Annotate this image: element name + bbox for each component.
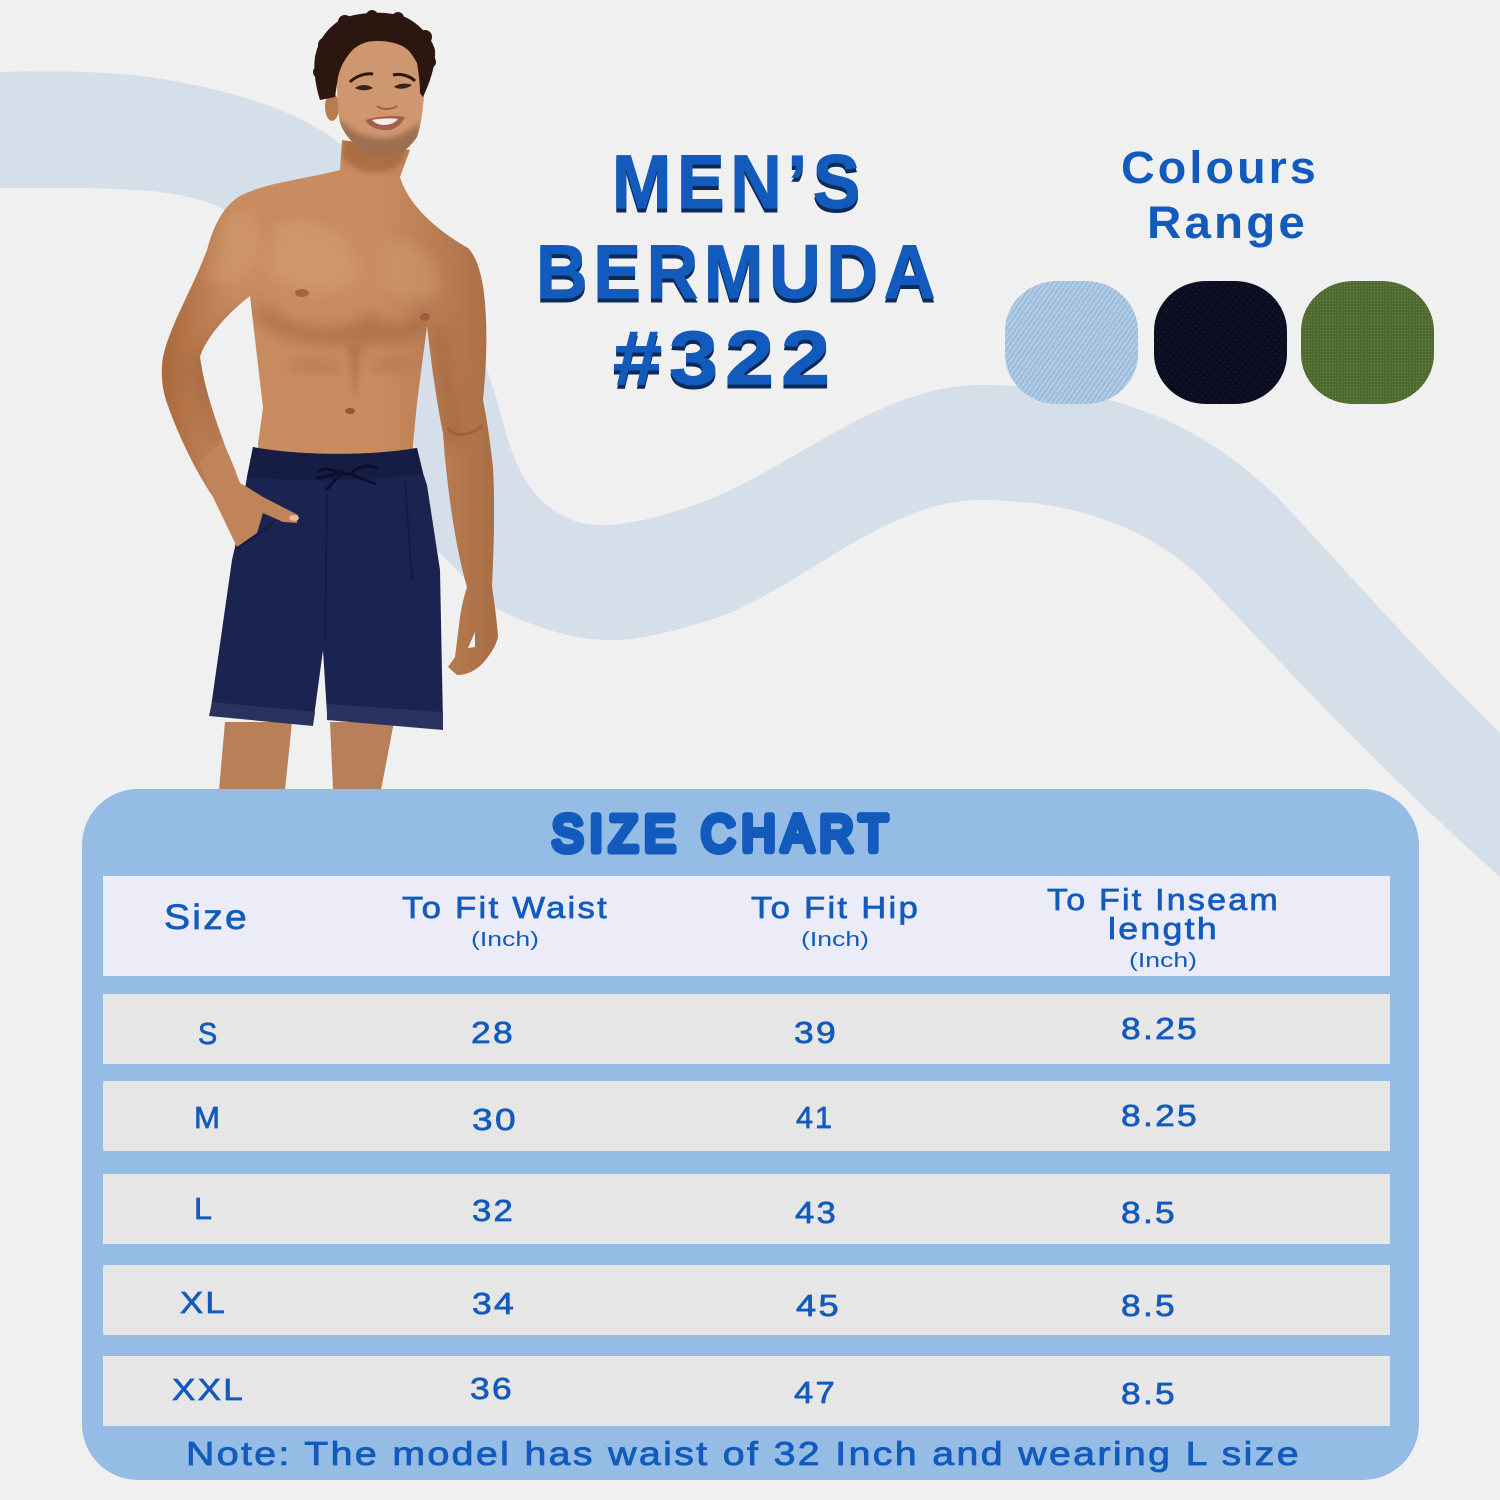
row: M: 41 (796, 1100, 834, 1135)
row: XXL: 36 (470, 1371, 514, 1406)
panel: size chart (82, 789, 1419, 1480)
hair (313, 10, 436, 100)
row: M (103, 1081, 1390, 1151)
fingernail (289, 515, 299, 521)
swatch: olive green (1301, 281, 1434, 404)
colours heading (1121, 142, 1319, 248)
row: L: 43 (795, 1195, 838, 1230)
colour swatches (1005, 281, 1434, 404)
row: L (103, 1174, 1390, 1244)
colours heading: Range (1147, 197, 1308, 248)
legs (219, 722, 394, 790)
smile (365, 116, 405, 130)
colours heading: Colours (1121, 142, 1319, 193)
title: MEN’S (612, 140, 866, 225)
title: #322 (613, 316, 837, 401)
row: S: S (198, 1016, 219, 1051)
head (313, 10, 436, 160)
row: S: 8.25 (1121, 1011, 1199, 1046)
table header row: Size (164, 898, 249, 937)
row: S: 28 (471, 1015, 515, 1050)
row: M: M (194, 1100, 222, 1135)
torso and arms (162, 140, 498, 675)
shorts (209, 447, 443, 730)
title: BERMUDA (536, 230, 941, 315)
row: S: 39 (794, 1015, 838, 1050)
table header row: To Fit Inseam (1047, 882, 1280, 917)
table header row: To Fit Waist (402, 890, 609, 925)
row: XL (103, 1265, 1390, 1335)
table header row: (Inch) (801, 929, 869, 951)
row: XXL: 8.5 (1121, 1376, 1177, 1411)
row: XXL: 47 (794, 1375, 837, 1410)
decorative wave band (0, 71, 1500, 877)
row: XL: 8.5 (1121, 1288, 1177, 1323)
row: XL: 34 (472, 1286, 516, 1321)
row: L: 8.5 (1121, 1195, 1177, 1230)
row: XL: 45 (796, 1288, 841, 1323)
row: L: 32 (472, 1193, 515, 1228)
note: Note: The model has waist of 32 Inch and wearing L size (186, 1435, 1301, 1472)
table header row: (Inch) (1129, 950, 1197, 972)
table header row: length (1108, 911, 1219, 946)
brows and eyes (350, 74, 415, 82)
swatch: dark navy (1154, 281, 1287, 404)
row: M: 30 (472, 1102, 518, 1137)
table header row: (Inch) (471, 929, 539, 951)
table header row: To Fit Hip (751, 890, 920, 925)
size chart heading: SIZE CHART (552, 805, 894, 862)
finger gap (468, 632, 475, 648)
muscle shading (192, 140, 483, 444)
row: XL: XL (180, 1285, 227, 1320)
table header row (103, 876, 1390, 976)
title (536, 140, 941, 401)
swatch: light denim (1005, 281, 1138, 404)
row: XXL: XXL (172, 1372, 245, 1407)
model photo illustration (162, 10, 498, 790)
row: L: L (194, 1191, 214, 1226)
row: XXL (103, 1356, 1390, 1426)
hand in pocket (200, 440, 298, 547)
row: S (103, 994, 1390, 1064)
row: M: 8.25 (1121, 1098, 1199, 1133)
